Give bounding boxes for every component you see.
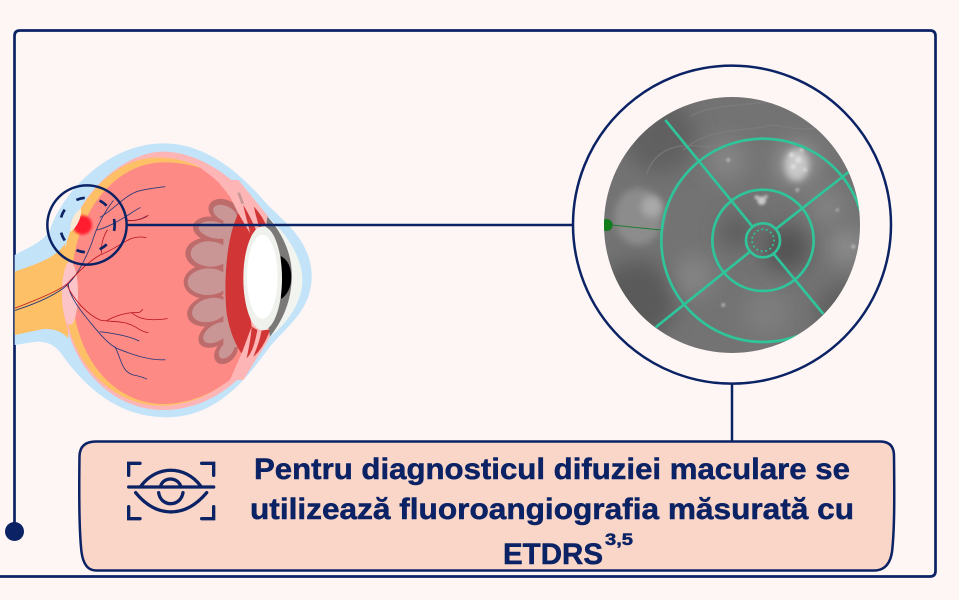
blue vessels: [15, 187, 165, 379]
macular red spot: [73, 215, 92, 235]
callout text: ETDRS: [503, 538, 603, 571]
callout text: utilizează fluoroangiografia măsurată cu: [250, 493, 854, 526]
magnifier circle: [47, 185, 127, 265]
callout text: Pentru diagnosticul difuziei maculare se: [254, 453, 850, 486]
pupil: [281, 256, 291, 299]
ciliary scallops: [183, 194, 246, 369]
iris: [260, 217, 292, 337]
eye anatomy illustration: [15, 143, 312, 417]
sclera: [62, 152, 272, 410]
dashed target ring: [60, 198, 115, 252]
anterior eye segment: [183, 180, 302, 380]
fundus angiography with ETDRS grid: [573, 66, 891, 384]
fundus ring: [573, 66, 891, 384]
red vessels: [15, 215, 167, 333]
connector from fundus to callout: [731, 384, 733, 442]
macular pale lesion: [70, 208, 81, 232]
eye outer blue layer: [15, 143, 312, 417]
callout text: [250, 453, 854, 571]
sclera front band: [217, 180, 280, 380]
optic disc pale area: [62, 262, 78, 325]
retina interior: [72, 162, 242, 404]
ciliary muscle: [225, 205, 270, 358]
bright leakage speckles: [722, 148, 855, 307]
connector from eye to fundus: [126, 224, 574, 226]
optic nerve: [15, 243, 68, 338]
callout background: [79, 442, 894, 570]
fundus photo: [597, 96, 877, 354]
lens: [243, 226, 282, 330]
ETDRS grid: [656, 120, 865, 342]
optic disc marker: [601, 219, 661, 231]
icon: scanned eye: [129, 463, 214, 519]
ciliary streak: [237, 193, 244, 204]
callout panel: [79, 442, 894, 571]
callout text: 3,5: [605, 531, 633, 549]
choroid: [63, 158, 224, 406]
cornea: [267, 217, 302, 337]
